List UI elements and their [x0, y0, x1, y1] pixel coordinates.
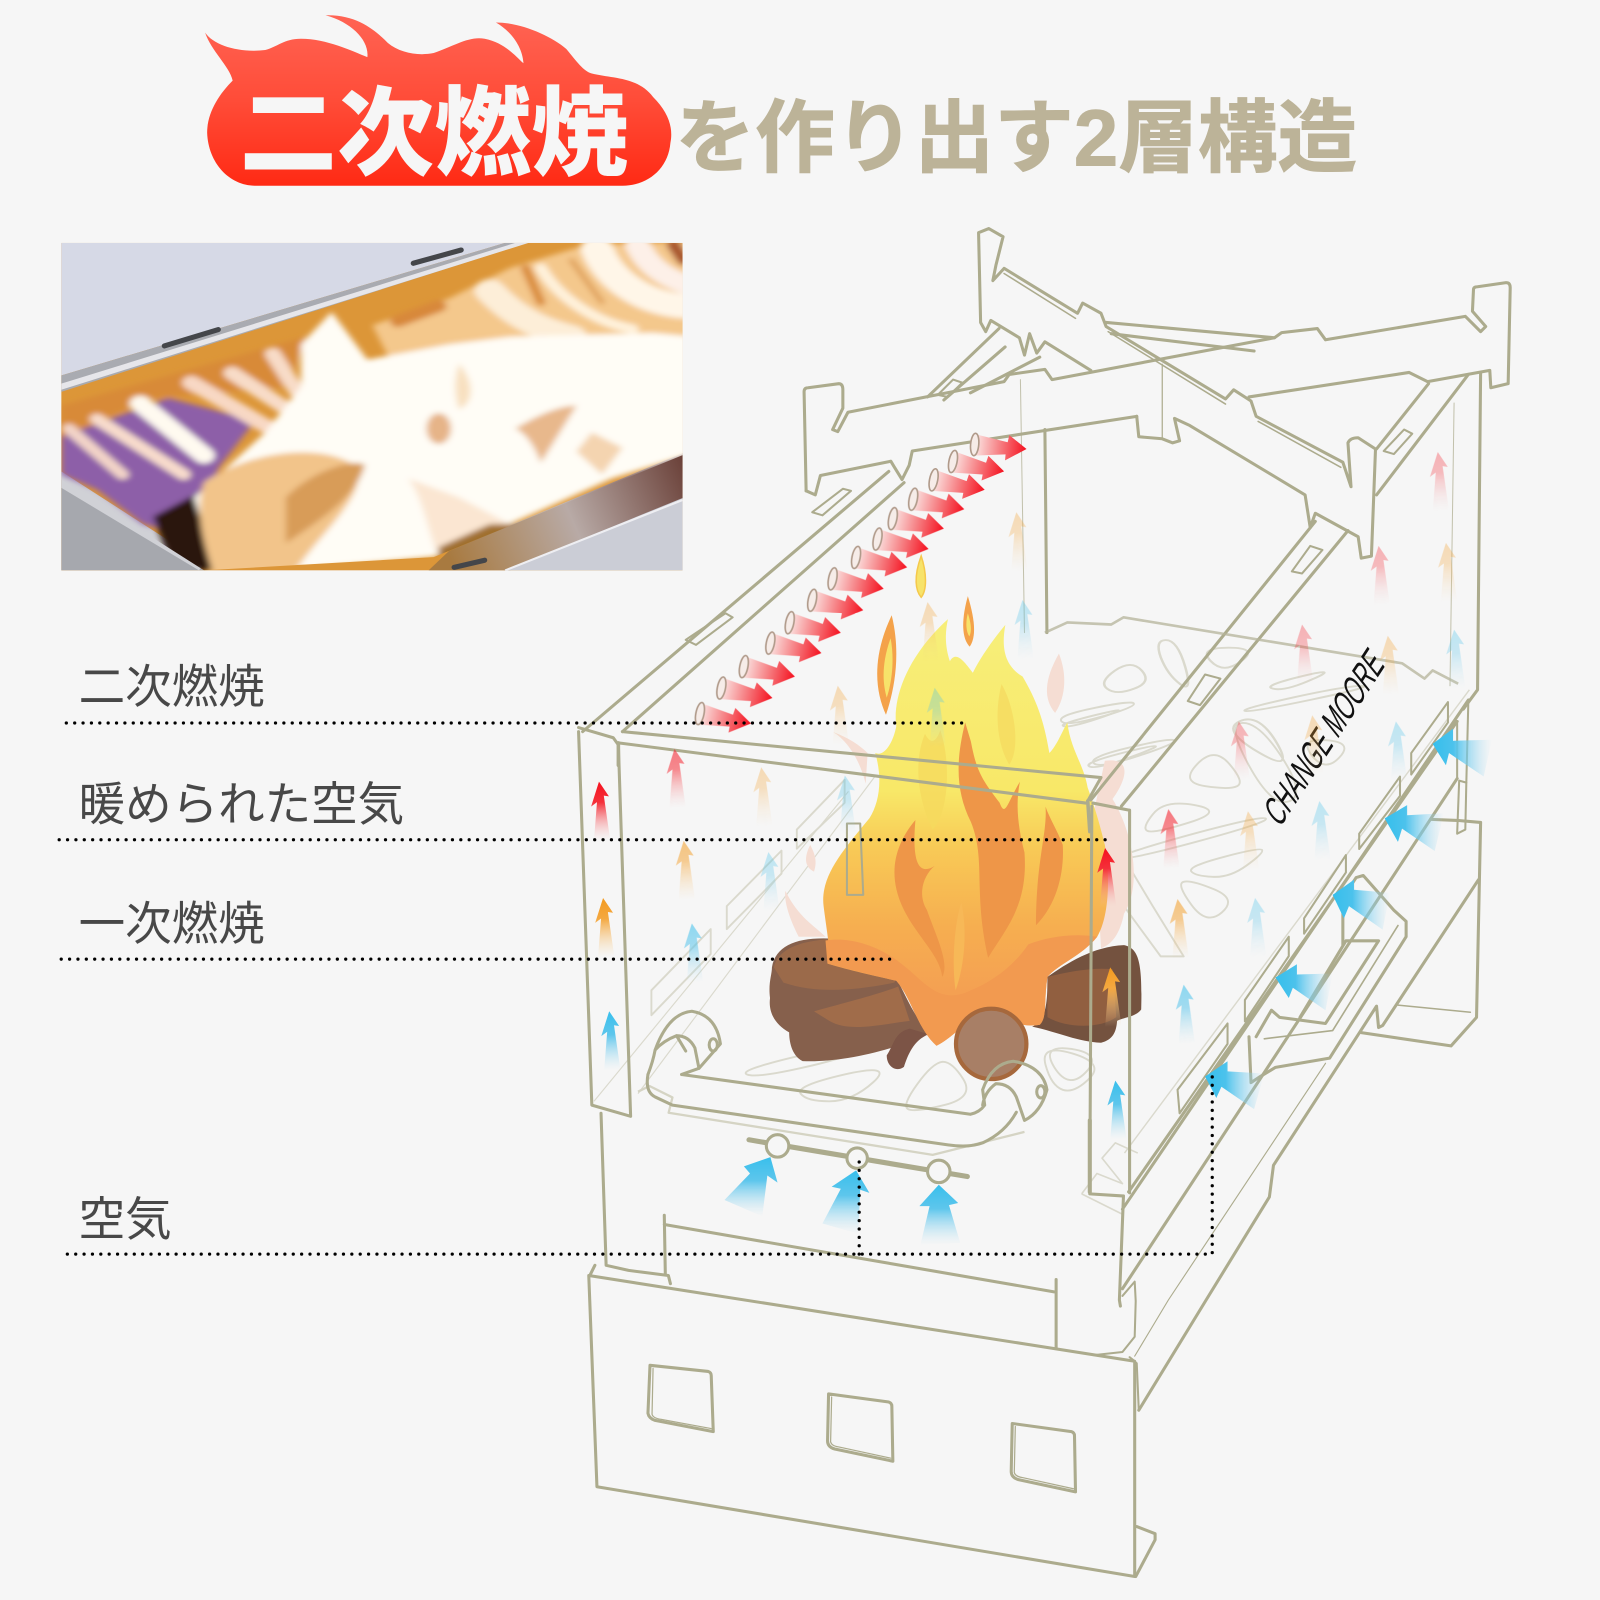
photo flame: upper right strands: [372, 241, 694, 356]
round log: [956, 1009, 1026, 1079]
back posts: [1045, 430, 1047, 633]
blue intake arrows: front: [724, 1157, 960, 1245]
photo flame base: purple zone: [61, 398, 255, 536]
right base block: [1139, 819, 1481, 1410]
recess: [664, 1215, 1056, 1348]
title text: を作り出す2層構造: [676, 93, 1357, 182]
right side handle: [1249, 876, 1406, 1083]
air rod: [749, 1140, 967, 1177]
title badge: flame with 二次燃焼: [205, 15, 671, 188]
right wall long lower edges: [1122, 700, 1468, 1209]
main flame: [823, 619, 1108, 1046]
label: 二次燃焼: 二次燃焼: [79, 661, 265, 713]
photo detail: slots: [164, 250, 485, 567]
faint grate and inner panel lines: [594, 640, 1469, 1214]
small flames: [877, 556, 974, 715]
label: 暖められた空気: 暖められた空気: [79, 778, 404, 830]
right wall top edges: [1091, 521, 1348, 806]
dotted leader lines: [59, 723, 1212, 1254]
windows: [648, 1365, 713, 1432]
lower body: [601, 1113, 670, 1284]
faded grate top edge: [1045, 617, 1458, 684]
photo detail: flame layers: [61, 241, 694, 578]
red secondary combustion tube arrows: [693, 432, 1028, 736]
lower edge of front bar: [806, 416, 1137, 495]
brand text: CHANGE MOORE: [1258, 639, 1390, 835]
label: 空気: 空気: [79, 1194, 172, 1246]
logs: [769, 938, 1141, 1069]
photo: secondary combustion flames: [61, 241, 694, 578]
photo flame: central white body: [194, 312, 694, 578]
stove upper frame and pot support: [579, 229, 1510, 1410]
rising air arrows: vertical: [590, 452, 1466, 1140]
bottom panel: [589, 1276, 1135, 1577]
ghost flames: [785, 654, 1134, 948]
front upper panel: [579, 728, 631, 1116]
fire: logs and flames: [769, 556, 1141, 1079]
left wall top edges: [583, 471, 904, 732]
stove lower frame and base: [589, 1113, 1155, 1577]
label: 一次燃焼: 一次燃焼: [79, 898, 265, 950]
vertical slot: [847, 823, 863, 895]
front handle: [682, 1061, 1047, 1120]
blue intake arrows: right side: [1205, 729, 1492, 1109]
front bar of pot support: [804, 283, 1510, 491]
title badge: flame with 二次燃焼: 二次燃焼: [240, 79, 629, 188]
